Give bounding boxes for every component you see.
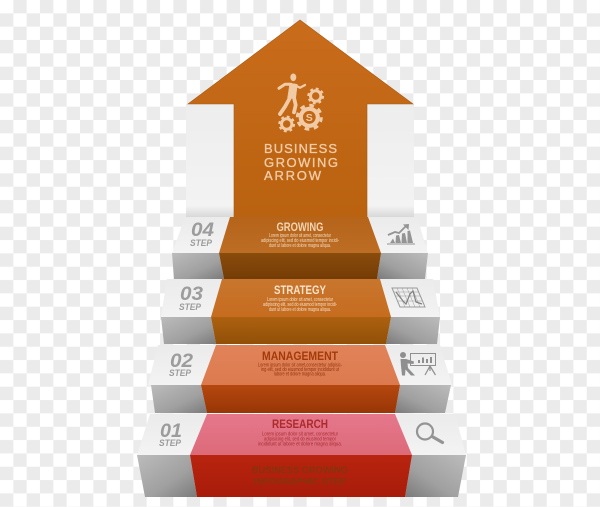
body text: dunt ut labore et dolore magna aliqua. — [269, 307, 331, 313]
icon: presenter at board — [400, 352, 436, 376]
body text: Lorem ipsum dolor sit amet, consectetur — [267, 297, 333, 303]
right white panel — [367, 104, 414, 217]
arrow title: GROWING — [264, 155, 338, 170]
red riser — [190, 455, 412, 497]
riser caption — [252, 465, 348, 486]
gray right riser — [377, 253, 428, 279]
step label: STEP — [179, 302, 202, 312]
gray left riser — [151, 385, 207, 413]
step 04 growing — [172, 217, 428, 279]
coral riser — [201, 385, 400, 413]
runner — [279, 74, 305, 114]
gray left riser — [172, 253, 224, 279]
arrow title: BUSINESS — [264, 141, 337, 156]
icon: magnifier — [417, 424, 442, 442]
body text: incididunt ut labore et dolore magna aliqua. — [258, 442, 342, 448]
body text: adipiscing elit, sed do eiusmod tempor incidi- — [261, 238, 339, 244]
arrow title: ARROW — [264, 168, 322, 183]
dollar sign: S — [306, 112, 313, 124]
body text: Lorem ipsum dolor sit amet, consectetur — [269, 233, 331, 239]
gray right riser — [395, 385, 451, 413]
riser caption: BUSINESS GROWING — [252, 465, 348, 475]
pink tread — [190, 414, 412, 455]
body text — [261, 233, 339, 249]
white stair top — [161, 279, 440, 317]
riser caption: INFOGRAPHIC STEP — [254, 476, 346, 486]
icon: line chart grid — [392, 288, 425, 307]
gray right riser — [405, 455, 466, 497]
body text: dunt ut labore et dolore magna aliqua. — [269, 243, 331, 249]
step 02 management — [148, 345, 452, 413]
small gear top — [308, 89, 323, 103]
white stair top — [172, 217, 428, 253]
step label: STEP — [169, 368, 192, 378]
step number: 03 — [180, 283, 203, 305]
heading: RESEARCH — [272, 417, 328, 431]
heading: STRATEGY — [274, 283, 326, 297]
body text: Lorem ipsum dolor sit amet,consectetur adipisic- — [258, 362, 342, 368]
orange tread — [211, 279, 391, 317]
step number: 02 — [170, 350, 193, 372]
orange riser — [211, 317, 391, 344]
coral tread — [201, 345, 400, 385]
body text — [258, 362, 342, 378]
small gear bottom — [279, 117, 294, 131]
step label: STEP — [190, 238, 213, 248]
arrow title — [264, 141, 338, 183]
icon: growth chart — [387, 224, 415, 244]
heading: GROWING — [276, 220, 324, 234]
white stair top — [137, 414, 466, 455]
gray left riser — [137, 455, 197, 497]
body text: Lorem ipsum dolor sit amet, consectetur — [262, 432, 338, 438]
step number: 01 — [160, 420, 182, 442]
icon: runner with gears — [279, 74, 323, 131]
gray right riser — [386, 317, 440, 344]
step label: STEP — [159, 438, 182, 448]
body text: adipisicing elit, sed do eiusmod tempor — [264, 436, 336, 442]
step number: 04 — [191, 219, 214, 241]
orange tread — [219, 217, 381, 253]
arrow — [186, 20, 414, 218]
white stair top — [148, 345, 452, 385]
body text: labore et dolore magna aliqua. — [274, 372, 326, 378]
arrow head and shaft — [188, 20, 413, 218]
body text: adipiscing elit, sed do eiusmod tempor incidi- — [263, 302, 337, 308]
body text — [263, 297, 337, 313]
gray left riser — [161, 317, 216, 344]
body text — [258, 432, 342, 448]
step 03 strategy — [161, 279, 440, 344]
step 01 research — [137, 414, 466, 497]
heading: MANAGEMENT — [262, 349, 339, 363]
left white panel — [186, 104, 234, 217]
body text: ing elit, sed do eiusmod tempor incididunt ut — [261, 367, 339, 373]
dollar gear — [297, 105, 321, 129]
orange riser — [219, 253, 381, 279]
